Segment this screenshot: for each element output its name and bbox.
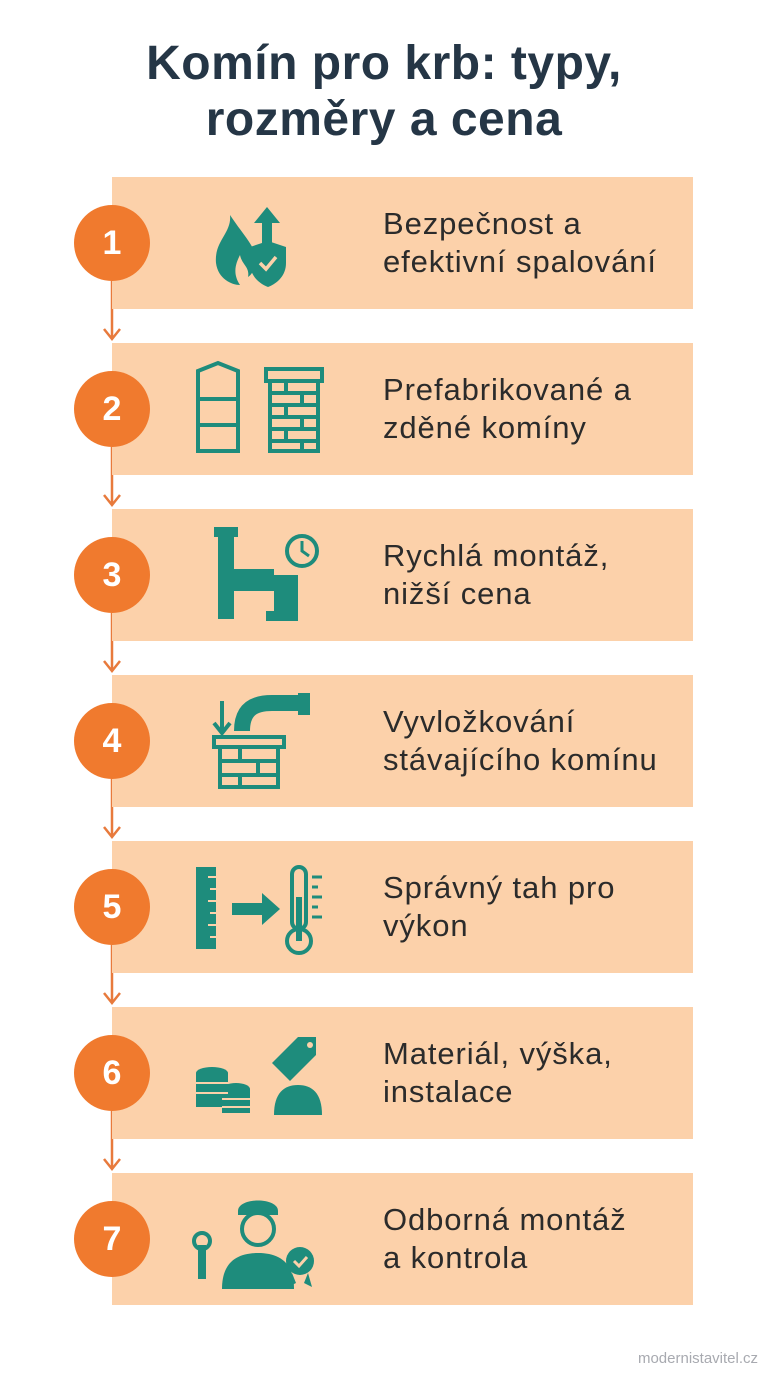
text: zděné komíny	[383, 410, 587, 445]
number 1	[74, 205, 150, 281]
text	[383, 704, 658, 777]
number 2: 2	[103, 390, 121, 428]
text: Správný tah pro	[383, 870, 615, 905]
text: Rychlá montáž,	[383, 538, 609, 573]
text	[383, 206, 657, 279]
text: Odborná montáž	[383, 1202, 627, 1237]
number 6: 6	[103, 1054, 121, 1092]
icon: coins, tag, helmet	[196, 1037, 322, 1115]
panel: step 7	[112, 1173, 693, 1305]
icon: ruler, arrow, thermometer	[196, 865, 322, 955]
text: nižší cena	[383, 576, 532, 611]
number 5	[74, 869, 150, 945]
number 5: 5	[103, 888, 121, 926]
text: stávajícího komínu	[383, 742, 658, 777]
number 7	[74, 1201, 150, 1277]
text: Bezpečnost a	[383, 206, 582, 241]
text	[383, 372, 632, 445]
text	[383, 1202, 627, 1275]
number 4	[74, 703, 150, 779]
number 3: 3	[103, 556, 121, 594]
text	[383, 1036, 613, 1109]
panel: step 5	[112, 841, 693, 973]
text: a kontrola	[383, 1240, 528, 1275]
number 4: 4	[103, 722, 121, 760]
number 7: 7	[103, 1220, 121, 1258]
number 2	[74, 371, 150, 447]
panel: step 2	[112, 343, 693, 475]
icon: liner into brick chimney	[212, 693, 310, 789]
icon: worker with wrench and badge	[192, 1200, 314, 1289]
text: instalace	[383, 1074, 513, 1109]
text: Vyvložkování	[383, 704, 575, 739]
number 3	[74, 537, 150, 613]
text: Materiál, výška,	[383, 1036, 613, 1071]
panel: step 3	[112, 509, 693, 641]
title: Komín pro krb: typy,	[146, 37, 622, 90]
title: rozměry a cena	[206, 93, 562, 146]
icon: prefab and brick chimneys	[196, 360, 324, 453]
icon: flame, arrow, shield	[216, 207, 286, 287]
text: Prefabrikované a	[383, 372, 632, 407]
panel: step 6	[112, 1007, 693, 1139]
text: efektivní spalování	[383, 244, 657, 279]
panel: step 1	[112, 177, 693, 309]
arrows between steps	[103, 281, 121, 1171]
text: výkon	[383, 908, 468, 943]
number 1: 1	[103, 224, 121, 262]
number 6	[74, 1035, 150, 1111]
icon: puzzle pipes and clock	[214, 527, 319, 621]
title	[146, 37, 622, 146]
footer watermark: modernistavitel.cz	[638, 1350, 758, 1367]
text	[383, 870, 615, 943]
text	[383, 538, 609, 611]
panel: step 4	[112, 675, 693, 807]
